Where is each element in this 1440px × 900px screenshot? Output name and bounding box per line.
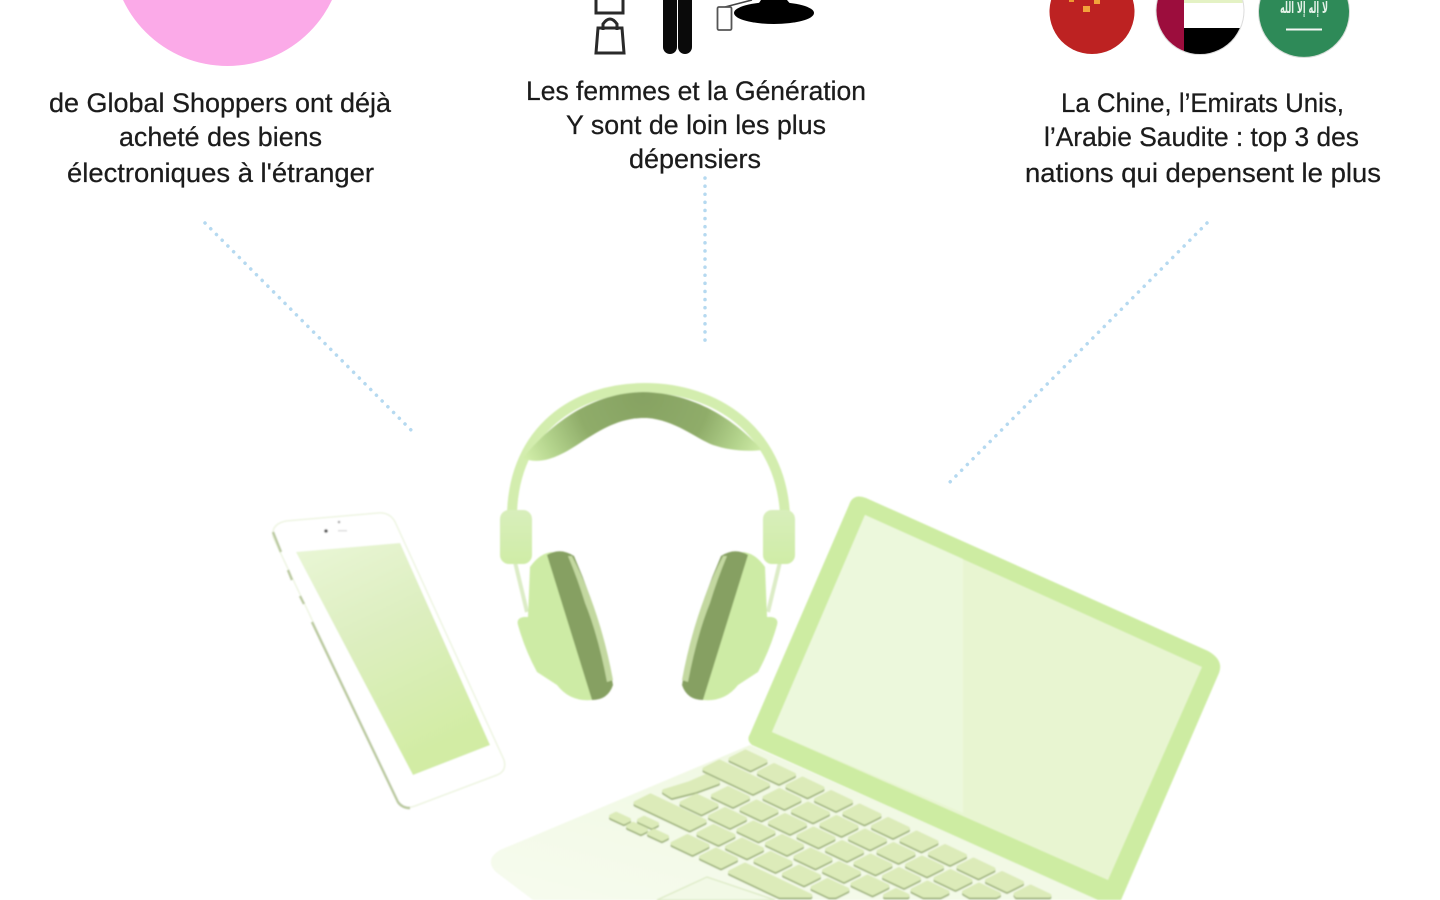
icon: smartphone [273, 513, 505, 808]
text: top 3 nations: La Chine, l’Emirats Unis, [1061, 88, 1344, 118]
right arm and yoke [682, 510, 795, 700]
icon: UAE flag [1156, 0, 1244, 55]
text: electronics shoppers: de Global Shoppers ont déjà [49, 88, 392, 118]
screen frame [748, 497, 1220, 900]
text: electronics shoppers: acheté des biens [119, 122, 322, 152]
text: top 3 nations [1025, 88, 1381, 188]
dotted connector: right [948, 223, 1207, 484]
dotted connector: centre [703, 178, 707, 343]
screen [772, 515, 1202, 880]
icon: laptop [491, 497, 1220, 900]
text: biggest spenders: Les femmes et la Génération [526, 76, 866, 106]
icon: shopping bags [596, 0, 624, 53]
screen highlight [772, 515, 963, 813]
text: top 3 nations: nations qui depensent le plus [1025, 158, 1381, 188]
left arm and yoke [500, 510, 613, 700]
headband [512, 388, 785, 514]
trackpad [657, 877, 775, 900]
text: electronics shoppers: électroniques à l'étranger [67, 158, 374, 188]
text: top 3 nations: l’Arabie Saudite : top 3 des [1044, 122, 1359, 152]
icon: headphones [500, 388, 795, 700]
icon: person legs [663, 0, 692, 54]
icon: China flag [1050, 0, 1134, 54]
icon: Saudi flag [1258, 0, 1350, 58]
laptop deck [491, 745, 1100, 900]
headband cushion [523, 392, 762, 461]
text: biggest spenders [526, 76, 866, 174]
text: electronics shoppers [49, 88, 392, 188]
text: biggest spenders: dépensiers [629, 144, 761, 174]
text: biggest spenders: Y sont de loin les plus [566, 110, 826, 140]
keyboard [611, 752, 1050, 898]
icon: hat with price tag [718, 0, 814, 30]
dotted connector: left [205, 223, 413, 432]
stat circle: pink [112, 0, 343, 66]
